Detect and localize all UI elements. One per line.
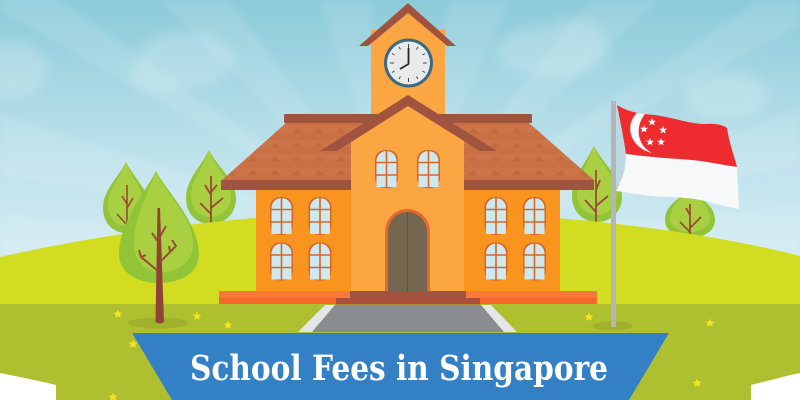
tree: back centre-right xyxy=(572,146,622,225)
tree: back left xyxy=(103,162,149,233)
title text: School Fees in Singapore xyxy=(190,348,608,389)
white corner: right xyxy=(751,373,800,400)
upper windows xyxy=(375,150,440,188)
yellow flowers xyxy=(108,310,714,400)
left wing windows xyxy=(270,197,332,280)
right wing windows xyxy=(484,197,546,280)
tree: back centre-left xyxy=(186,150,236,224)
steps xyxy=(336,291,480,304)
driveway xyxy=(298,305,517,332)
base plinth xyxy=(219,291,597,304)
flag xyxy=(593,101,739,330)
title banner xyxy=(132,333,669,400)
clock xyxy=(384,38,433,88)
tree: front left xyxy=(119,171,199,328)
tree: back right xyxy=(665,190,715,238)
clouds xyxy=(0,18,767,119)
clock tower xyxy=(359,3,456,120)
hill xyxy=(0,210,800,310)
centre gable xyxy=(320,95,497,151)
lawn xyxy=(0,304,800,400)
white corner: left xyxy=(0,373,56,400)
door xyxy=(385,209,430,292)
centre block xyxy=(351,104,464,292)
wings xyxy=(256,190,560,292)
school building xyxy=(219,3,597,304)
main roof xyxy=(221,114,595,190)
